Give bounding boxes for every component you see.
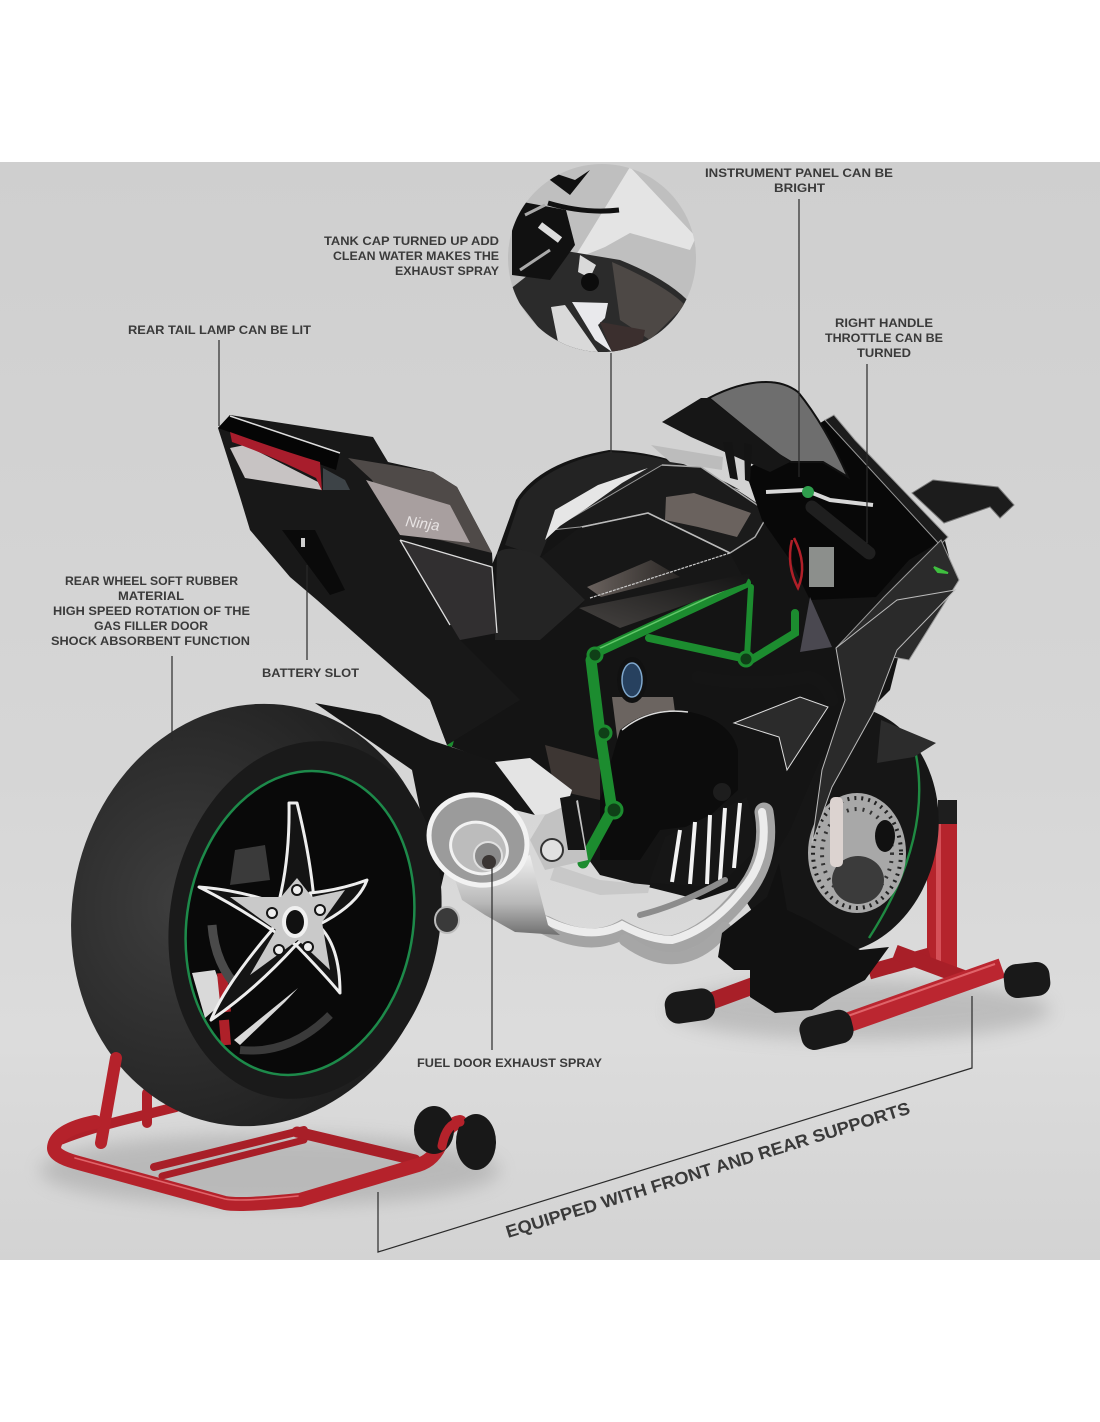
engine block: [612, 697, 680, 760]
green trellis frame: [450, 581, 795, 863]
smoked side cover: Ninja: [404, 513, 441, 535]
left screen bracket: [662, 398, 790, 472]
exhaust muffler: [414, 758, 588, 935]
cap: [578, 255, 596, 276]
funnel: [578, 168, 694, 254]
callout: rear wheel: REAR WHEEL SOFT RUBBER: [65, 574, 238, 588]
callout: rear tail lamp: REAR TAIL LAMP CAN BE LIT: [128, 323, 312, 337]
muffler outlet: [414, 779, 542, 901]
radiator plate: [734, 697, 828, 770]
callout: instrument panel: [705, 166, 893, 477]
swingarm: [315, 703, 535, 900]
tail lamp: [230, 432, 350, 491]
callout: rear wheel: GAS FILLER DOOR: [94, 619, 208, 633]
callout: instrument panel: BRIGHT: [774, 181, 826, 195]
callout: rear wheel: MATERIAL: [118, 589, 184, 603]
chrome manifold: [649, 797, 759, 887]
fuel tank and seat: [495, 452, 769, 640]
upper dark stripe: [218, 415, 340, 470]
battery slot recess: [282, 530, 345, 595]
spokes: [199, 803, 367, 1020]
callout: rear wheel: SHOCK ABSORBENT FUNCTION: [51, 634, 250, 648]
wheel bolts: [266, 884, 326, 956]
tank highlight: [545, 468, 648, 540]
handlebar cluster: [512, 200, 575, 280]
front fender: [877, 720, 936, 763]
callout: battery slot: BATTERY SLOT: [262, 666, 360, 680]
tank clear window: [551, 465, 769, 553]
oil cap: [617, 657, 647, 703]
callout: right handle throttle: THROTTLE CAN BE: [825, 331, 943, 345]
rear stand back tubes: [60, 973, 226, 1140]
coolant hose: [698, 677, 832, 700]
callout: tank cap: CLEAN WATER MAKES THE: [333, 249, 499, 263]
hub star: [230, 878, 345, 975]
infographic: motorcycle model on stands: [0, 162, 1100, 1260]
green accents: [898, 567, 948, 620]
right screen frame: [825, 415, 948, 545]
front strap and fork base: [718, 863, 889, 1013]
rear stand loop: [54, 1122, 460, 1204]
tank lower panel: [541, 513, 746, 628]
mount bracket: [495, 758, 572, 815]
footpeg: [550, 865, 650, 895]
tyre sidewall: [141, 719, 469, 1121]
lower fairing: [812, 590, 955, 843]
floor shadows: [40, 980, 1050, 1206]
callout: instrument panel: INSTRUMENT PANEL CAN BE: [705, 166, 893, 180]
callout: front and rear supports: [378, 996, 972, 1252]
stand knobs: [414, 1106, 496, 1170]
reflections: [551, 305, 598, 352]
tank cap inset circle: [505, 160, 700, 355]
tail body: [218, 415, 520, 745]
callout: rear wheel: [51, 574, 250, 741]
callout: tank cap: EXHAUST SPRAY: [395, 264, 499, 278]
callout: fuel door exhaust spray: FUEL DOOR EXHAUST SPRAY: [417, 1056, 602, 1070]
gaps through wheel: [192, 970, 298, 1045]
callout: right handle throttle: TURNED: [857, 346, 911, 360]
hub: [284, 908, 306, 936]
cockpit dark mass: [745, 415, 948, 600]
rear stand: [54, 1058, 496, 1204]
rear stand post: [101, 1058, 116, 1143]
wheel interior: [163, 754, 437, 1092]
callout: tank cap: TANK CAP TURNED UP ADD: [324, 234, 499, 248]
main body silhouette: [430, 450, 955, 900]
stand feet: [663, 961, 1052, 1053]
engine: [545, 657, 766, 958]
engine side cover: [600, 710, 738, 860]
tail section: [218, 415, 520, 745]
exhaust headers: [545, 812, 766, 958]
rear wheel: [38, 674, 472, 1156]
green rim stripe: [162, 753, 438, 1093]
smoked side cover: [348, 458, 497, 640]
front fairing and windscreen: [651, 382, 1014, 843]
mirror: [912, 480, 1014, 523]
stand post: [927, 800, 957, 967]
callout: tank cap: [324, 234, 611, 453]
tyre tread: [38, 674, 472, 1156]
seat: [495, 549, 590, 640]
windscreen: [709, 382, 848, 477]
callout: right handle throttle: RIGHT HANDLE: [835, 316, 933, 330]
handlebar grip and controls: [766, 486, 873, 588]
callout: front and rear supports: EQUIPPED WITH FRONT AND REAR SUPPORTS: [503, 1098, 912, 1242]
upper side fairing: [837, 540, 959, 660]
callout: battery slot: [262, 565, 360, 680]
brake disc: [808, 793, 906, 913]
muffler body: [455, 855, 560, 935]
front stand: [663, 800, 1052, 1053]
front wheel: [712, 689, 958, 971]
callout: rear wheel: HIGH SPEED ROTATION OF THE: [53, 604, 250, 618]
tank: [509, 250, 692, 355]
photo background: [0, 162, 1100, 1260]
tank top shell: [505, 452, 740, 557]
brake detail: [230, 845, 270, 885]
callout: right handle throttle: [825, 316, 943, 543]
